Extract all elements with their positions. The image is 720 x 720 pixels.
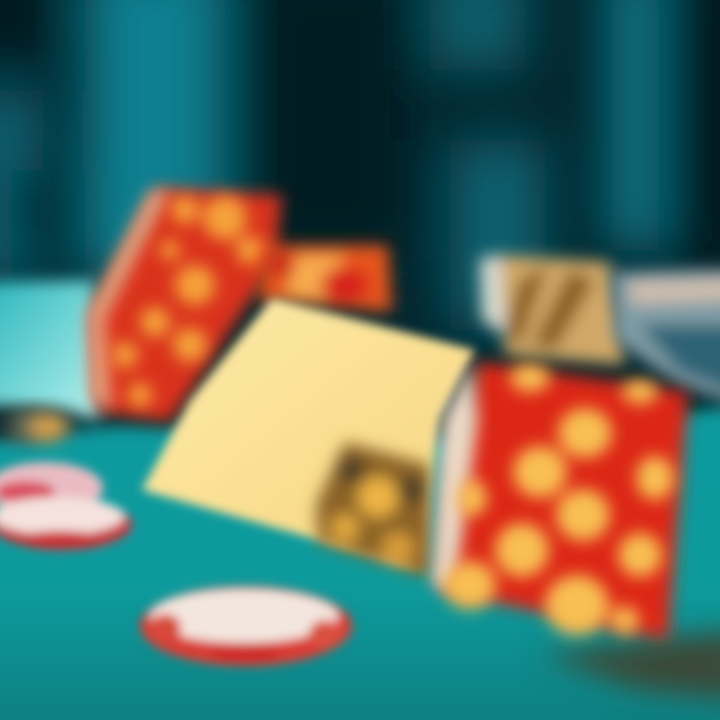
red chip stack, rear middle	[258, 245, 392, 312]
gold striped stack, rear right	[480, 255, 625, 365]
red chip stack, rear left	[88, 188, 282, 422]
gold chip stack, front	[316, 442, 432, 578]
large yellow playing card	[142, 298, 475, 570]
red and white chips, left edge	[0, 462, 132, 550]
small gold chip, left edge	[0, 408, 73, 444]
red chip stack with yellow spots, front right	[432, 362, 688, 640]
teal table surface	[0, 280, 720, 720]
red and white chip, foreground	[140, 586, 352, 666]
card, far right	[612, 268, 720, 405]
